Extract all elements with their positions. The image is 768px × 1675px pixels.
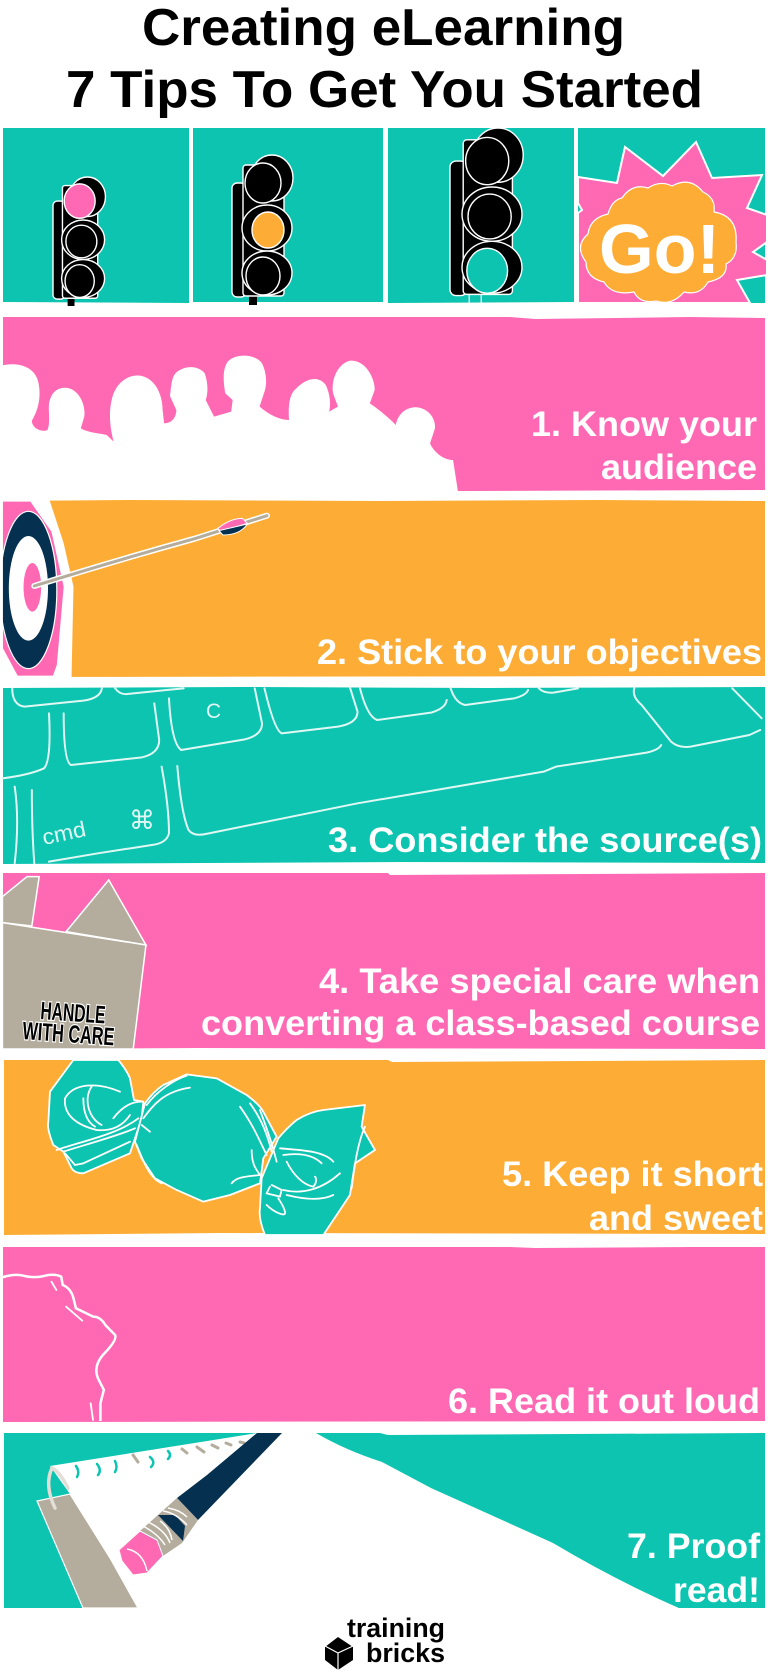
panel: tip 7 proof read [4, 1433, 765, 1610]
panel: amber light [193, 128, 383, 305]
candy [48, 1060, 375, 1235]
icon: starburst [578, 142, 767, 303]
icon: orange cloud [580, 182, 736, 302]
panel: tip 6 read it out loud [2, 1247, 765, 1422]
notepad backing [37, 1494, 138, 1608]
tip text: 2. Stick to your objectives [317, 633, 762, 672]
tip text: 4. Take special care when [319, 962, 760, 1001]
title: 7 Tips To Get You Started [66, 61, 703, 119]
panel: tip 5 short and sweet [4, 1060, 765, 1238]
tip text: 1. Know your [531, 405, 757, 444]
traffic light with pink lamp [53, 177, 105, 306]
handle with care stamp: HANDLE [40, 997, 106, 1030]
tip text: read! [673, 1571, 760, 1610]
panel: tip 1 know your audience [0, 317, 765, 492]
pencil [119, 1433, 282, 1575]
cardboard box [2, 877, 146, 1049]
tip text [531, 405, 757, 487]
tip text: and sweet [589, 1199, 763, 1238]
traffic light with teal lamp [450, 128, 523, 305]
target and arrow [0, 498, 267, 678]
logo: training bricks [325, 1613, 445, 1670]
panel: tip 3 consider the sources [2, 687, 765, 864]
key labels [40, 700, 221, 850]
keyboard drawing [2, 688, 762, 863]
notepad and pencil [37, 1433, 681, 1609]
tip text: 3. Consider the source(s) [328, 821, 762, 860]
tip text [201, 962, 760, 1043]
logo: training bricks: training [347, 1613, 445, 1643]
key labels: C [206, 700, 221, 723]
panel: tip 4 special care [2, 873, 765, 1051]
tip text: 7. Proof [627, 1527, 760, 1566]
handle with care stamp [22, 997, 115, 1051]
tip text [627, 1527, 760, 1610]
traffic light with orange lamp [232, 155, 293, 305]
tip text: audience [601, 448, 757, 487]
key labels: cmd [40, 816, 88, 850]
arrow [34, 516, 267, 586]
tip text: converting a class-based course [201, 1004, 760, 1043]
icon: head outline [2, 1275, 115, 1421]
notepad page [50, 1433, 681, 1609]
panel: traffic lights strip [3, 128, 767, 306]
panel: big light [388, 128, 574, 305]
tip text [502, 1155, 763, 1238]
logo: training bricks: bricks [366, 1638, 445, 1668]
key labels: ⌘ [129, 806, 155, 836]
panel: go burst [578, 128, 767, 303]
panel: red light [3, 128, 189, 306]
title [66, 0, 703, 119]
tip text: 5. Keep it short [502, 1155, 763, 1194]
panel: tip 2 stick to your objectives [0, 498, 765, 678]
spiral binding [49, 1442, 244, 1508]
crowd silhouette [0, 356, 458, 492]
title: Creating eLearning [142, 0, 625, 57]
tip text: 6. Read it out loud [448, 1382, 760, 1421]
handle with care stamp: WITH CARE [22, 1017, 115, 1051]
icon: cube [325, 1637, 353, 1670]
go label: Go! [599, 210, 720, 288]
